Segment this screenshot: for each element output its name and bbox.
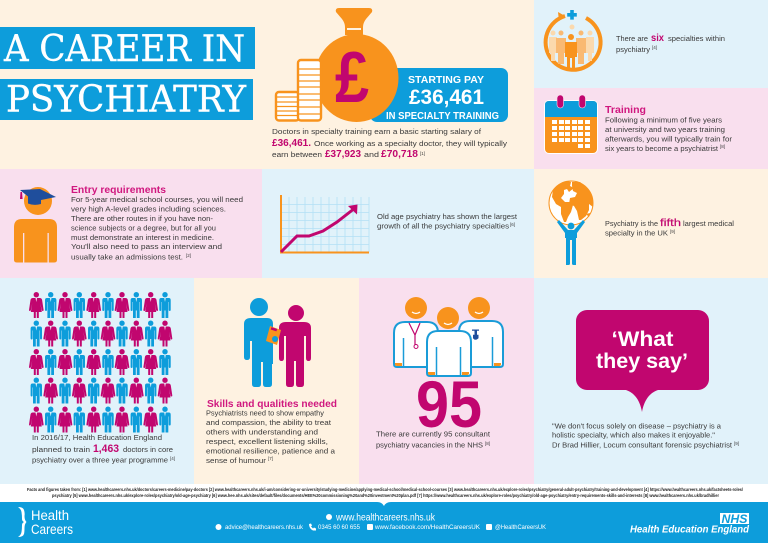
panel: doctors in training (0, 278, 194, 484)
website: www.healthcareers.nhs.uk (335, 512, 436, 524)
growth text (377, 212, 518, 230)
title (0, 27, 255, 120)
salary text: [1] (420, 151, 425, 156)
entry text: You'll also need to pass an interview and (71, 242, 222, 251)
training numbers text: [4] (170, 456, 175, 461)
salary text: £70,718 (381, 148, 418, 160)
contact details: www.facebook.com/HealthCareersUK (374, 524, 481, 531)
starting pay box: STARTING PAY (408, 74, 484, 86)
six specialties text: specialties within (668, 34, 725, 43)
icon: money bag (314, 8, 398, 122)
skills text: and compassion, the ability to treat (206, 418, 332, 427)
training numbers text: psychiatry over a three year programme (32, 456, 168, 464)
entry text: For 5-year medical school courses, you will need (71, 195, 243, 204)
panel: consultant vacancies (359, 278, 534, 484)
panel: title and starting pay (0, 0, 534, 169)
skills text: others with understanding and (206, 428, 318, 436)
vacancies text: psychiatry vacancies in the NHS (376, 440, 483, 450)
skills text: [7] (268, 456, 273, 461)
panel: six specialties (534, 0, 768, 88)
skills text: sense of humour (206, 456, 266, 465)
salary text: £37,923 (325, 148, 361, 160)
training numbers text (32, 433, 175, 464)
quote text: "We don't focus solely on disease – psychiatry is a (552, 422, 722, 430)
entry text: [2] (186, 253, 191, 258)
skills text: respect, excellent listening skills, (206, 437, 328, 446)
skills text: emotional resilience, patience and a (206, 446, 336, 456)
quote text: [9] (734, 441, 739, 446)
pictogram: fifty doctors (29, 292, 172, 432)
big number 95: 95 (416, 367, 482, 441)
panel: old age psychiatry growth (262, 169, 534, 278)
speech bubble: they say’ (596, 349, 688, 373)
training numbers text: In 2016/17, Health Education England (32, 433, 162, 442)
training text: afterwards, you will typically train for (605, 134, 732, 144)
panel: what they say (534, 278, 768, 484)
icon: three doctors (394, 297, 503, 376)
starting pay box: IN SPECIALTY TRAINING (386, 111, 499, 122)
starting pay box (370, 68, 508, 122)
six specialties text (616, 32, 725, 54)
fifth text: Psychiatry is the (605, 219, 658, 228)
salary text (272, 127, 507, 160)
icon: people in circular arrow (546, 10, 601, 70)
panel: entry requirements (0, 169, 262, 278)
entry text (71, 195, 243, 262)
title: A CAREER IN (3, 29, 245, 70)
footnotes (27, 487, 744, 498)
vacancies text: There are currently 95 consultant (376, 430, 491, 438)
salary text: £36,461. (272, 137, 311, 149)
contact details: @HealthCareersUK (495, 524, 547, 531)
entry text: science subjects or a degree, but for all you (71, 224, 216, 232)
skills text: Psychiatrists need to show empathy (206, 408, 324, 418)
training numbers text: 1,463 (93, 443, 119, 455)
contact details: advice@healthcareers.nhs.uk (225, 524, 304, 531)
logo: Health Careers: Careers (31, 521, 73, 537)
logo: NHS Health Education England: NHS (722, 512, 748, 526)
training text: at university and two years training (605, 125, 725, 134)
fifth text: fifth (660, 217, 681, 229)
skills text (206, 408, 336, 465)
entry text: There are other routes in if you have non- (71, 214, 213, 223)
quote text: holistic specialty, which also makes it enjoyable." (552, 430, 715, 440)
salary text: earn between (272, 150, 322, 159)
six specialties text: There are (616, 34, 648, 43)
logo: Health Careers (18, 507, 73, 537)
training text (605, 116, 732, 153)
logo: Health Careers: Health (31, 507, 69, 523)
fifth text: [9] (670, 229, 675, 234)
speech bubble: ‘What (612, 327, 674, 351)
six specialties text: psychiatry (616, 45, 650, 54)
skills heading: Skills and qualities needed (207, 398, 337, 410)
vacancies text: [8] (485, 441, 490, 446)
logo: NHS Health Education England (630, 512, 750, 536)
growth text: Old age psychiatry has shown the largest (377, 212, 518, 221)
entry heading: Entry requirements (71, 184, 166, 196)
six specialties text: [4] (652, 45, 657, 50)
starting pay box: £36,461 (409, 86, 484, 109)
training numbers text: doctors in core (123, 445, 173, 454)
icon: calendar (544, 95, 598, 154)
salary text: Once working as a specialty doctor, they will typically (314, 139, 507, 148)
title: PSYCHIATRY (6, 80, 247, 120)
contact details (216, 524, 547, 531)
icon: graduate (14, 187, 57, 262)
salary text: and (364, 150, 379, 159)
growth text: [6] (510, 222, 515, 227)
training numbers text: planned to train (32, 445, 90, 454)
icon: figure holding globe (549, 181, 593, 265)
icon: money bag: £ (335, 38, 369, 118)
growth text: growth of all the psychiatry specialties (377, 222, 509, 230)
icon: coin stacks (276, 60, 321, 120)
training text: [8] (720, 144, 725, 149)
fifth text: specialty in the UK (605, 228, 668, 238)
icon: two people with clipboard (244, 298, 311, 387)
panel: fifth largest specialty (534, 169, 768, 278)
entry text: must demonstrate an interest in medicine. (71, 233, 214, 242)
line chart (281, 195, 369, 252)
fifth text (605, 217, 734, 238)
fifth text: largest medical (683, 219, 734, 228)
quote text (552, 422, 739, 450)
six specialties text: six (651, 32, 664, 44)
panel: skills and qualities (194, 278, 359, 484)
contact details: 0345 60 60 655 (318, 524, 360, 531)
salary text: Doctors in specialty training earn a basic starting salary of (272, 127, 482, 136)
logo: NHS Health Education England: Health Education England (630, 524, 750, 536)
entry text: very high A-level grades including sciences. (71, 204, 226, 214)
training heading: Training (605, 104, 646, 116)
entry text: usually take an admissions test. (71, 252, 183, 262)
panel: training (534, 88, 768, 169)
vacancies text (376, 430, 491, 450)
quote text: Dr Brad Hillier, Locum consultant forensic psychiatrist (552, 440, 733, 450)
speech bubble (576, 310, 709, 412)
training text: Following a minimum of five years (605, 116, 722, 124)
training text: six years to become a psychiatrist (605, 144, 719, 153)
footer (0, 502, 768, 543)
